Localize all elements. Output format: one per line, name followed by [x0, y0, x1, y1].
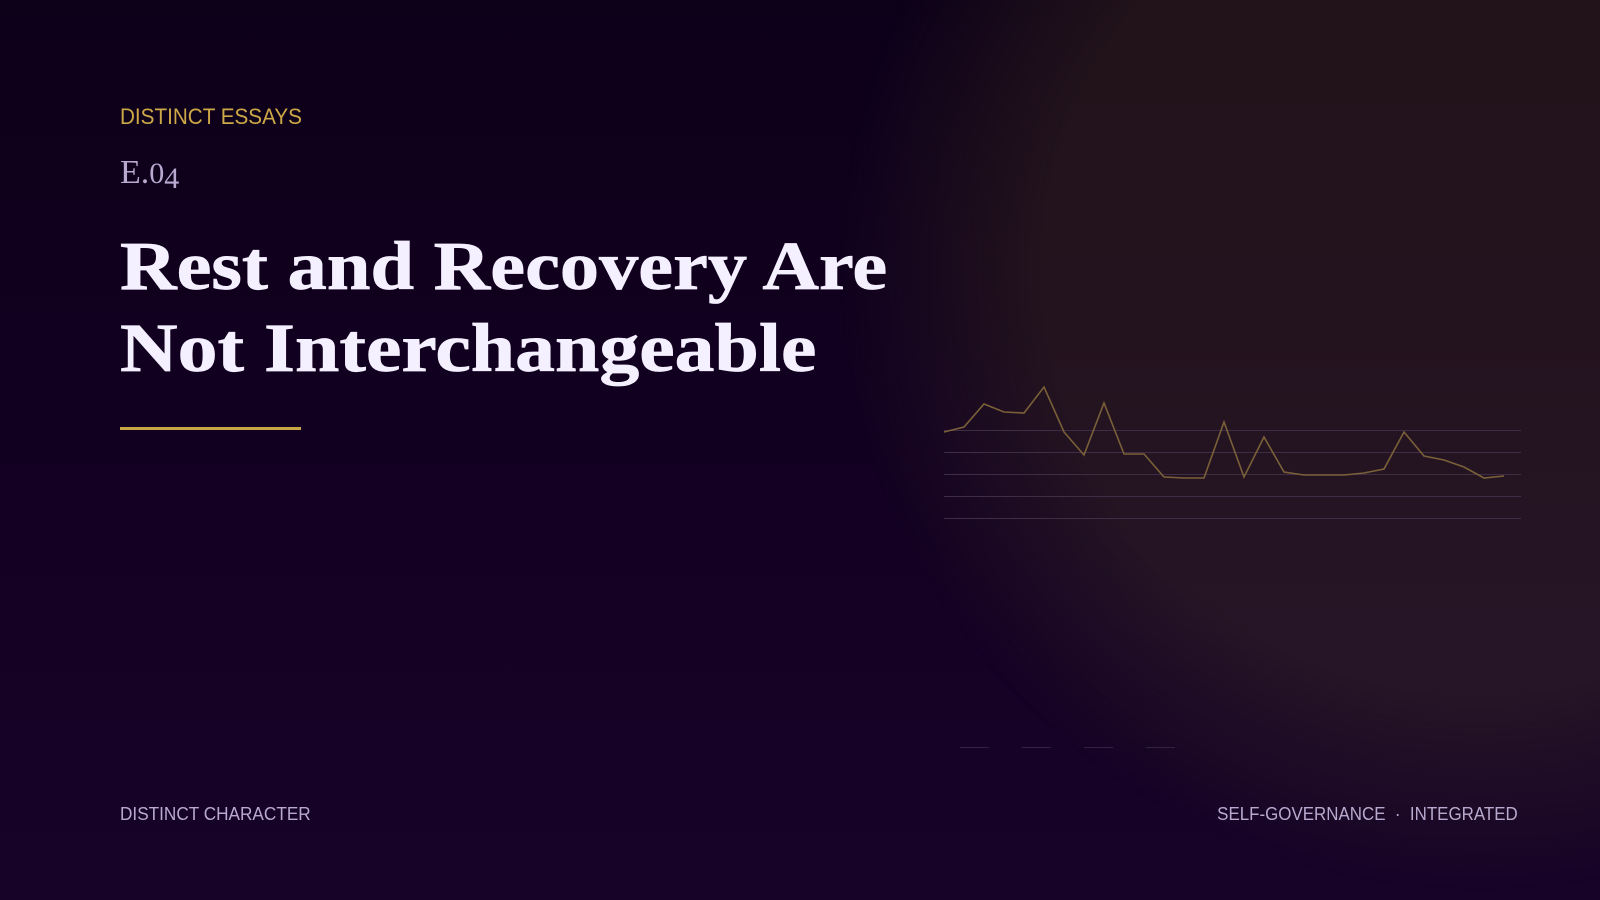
footer left label: DISTINCT CHARACTER: [120, 804, 311, 824]
footer right label: SELF-GOVERNANCE · INTEGRATED: [1217, 804, 1518, 824]
essay number: E.04: [120, 154, 179, 195]
title: Not Interchangeable: [120, 309, 816, 386]
eyebrow label: DISTINCT ESSAYS: [120, 104, 302, 129]
title: Rest and Recovery Are: [120, 227, 887, 304]
gold accent rule: [120, 427, 301, 430]
title: [120, 227, 887, 386]
